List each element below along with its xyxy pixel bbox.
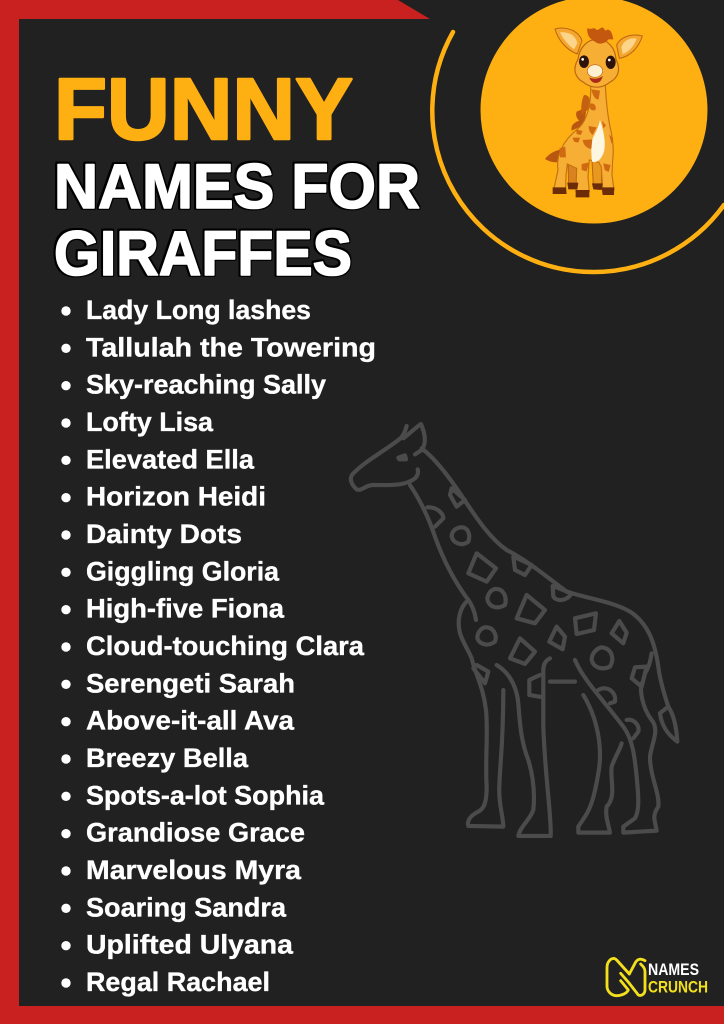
name: Breezy Bella: Breezy Bella [86, 743, 249, 773]
name: Sky-reaching Sally: Sky-reaching Sally [86, 370, 326, 400]
title: GIRAFFES: GIRAFFES [54, 219, 352, 289]
orange arc [432, 32, 724, 272]
name: High-five Fiona: High-five Fiona [86, 594, 285, 624]
title: FUNNY: FUNNY [54, 61, 353, 158]
name: Grandiose Grace: Grandiose Grace [86, 818, 305, 848]
logo: Names Crunch [607, 958, 708, 996]
icon: baby giraffe [545, 28, 642, 197]
name: Uplifted Ulyana: Uplifted Ulyana [86, 930, 294, 960]
logo text: CRUNCH: CRUNCH [648, 978, 708, 996]
name: Lady Long lashes: Lady Long lashes [86, 295, 311, 325]
name: Cloud-touching Clara: Cloud-touching Clara [86, 631, 365, 661]
name: Spots-a-lot Sophia: Spots-a-lot Sophia [86, 780, 325, 810]
name: Elevated Ella: Elevated Ella [86, 444, 255, 474]
name: Regal Rachael: Regal Rachael [86, 967, 270, 997]
name: Giggling Gloria: Giggling Gloria [86, 556, 280, 586]
logo mark [607, 958, 645, 996]
orange circle [480, 0, 708, 224]
name: Soaring Sandra: Soaring Sandra [86, 892, 287, 922]
name: Lofty Lisa: Lofty Lisa [86, 407, 214, 437]
name: Horizon Heidi: Horizon Heidi [86, 482, 266, 512]
name: Dainty Dots: Dainty Dots [86, 519, 242, 549]
name: Serengeti Sarah: Serengeti Sarah [86, 668, 295, 698]
logo text: NAMES: NAMES [648, 960, 699, 979]
name: Marvelous Myra: Marvelous Myra [86, 855, 302, 885]
name: Above-it-all Ava: Above-it-all Ava [86, 706, 295, 736]
name: Tallulah the Towering: Tallulah the Towering [86, 332, 376, 362]
title: NAMES FOR: NAMES FOR [54, 152, 420, 222]
icon: giraffe outline silhouette [351, 424, 677, 836]
list of giraffe names [61, 295, 376, 997]
